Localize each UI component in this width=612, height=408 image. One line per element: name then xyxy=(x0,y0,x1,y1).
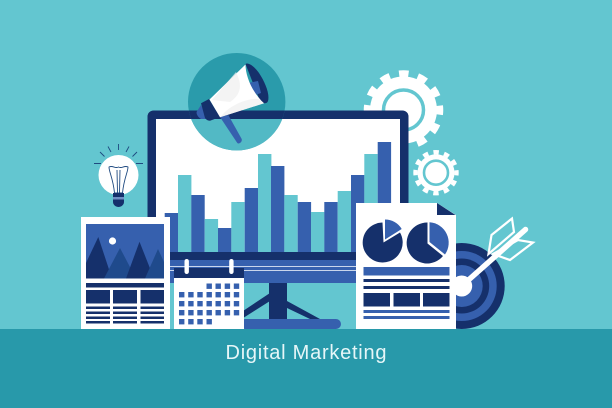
monitor frame xyxy=(148,110,408,283)
monitor chin xyxy=(148,260,408,283)
title: Digital Marketing xyxy=(226,342,386,364)
bar chart xyxy=(165,142,391,252)
picture: mountains xyxy=(86,224,164,278)
megaphone badge xyxy=(188,53,285,150)
arrow xyxy=(462,218,533,286)
icon: small gear xyxy=(416,152,456,193)
calendar days xyxy=(179,284,239,324)
report lines and table xyxy=(364,267,450,319)
icon: large gear xyxy=(368,74,440,146)
target xyxy=(419,218,533,329)
pie chart left xyxy=(363,220,403,262)
monitor screen xyxy=(156,119,400,252)
icon: megaphone xyxy=(197,63,268,143)
icon: light bulb xyxy=(94,144,143,207)
pie chart right xyxy=(407,222,449,263)
photo document xyxy=(81,217,170,329)
calendar xyxy=(174,259,244,329)
monitor xyxy=(148,110,408,283)
ground band xyxy=(0,329,612,408)
monitor stand xyxy=(240,283,341,329)
text lines and table xyxy=(86,283,164,324)
report document xyxy=(356,203,456,329)
